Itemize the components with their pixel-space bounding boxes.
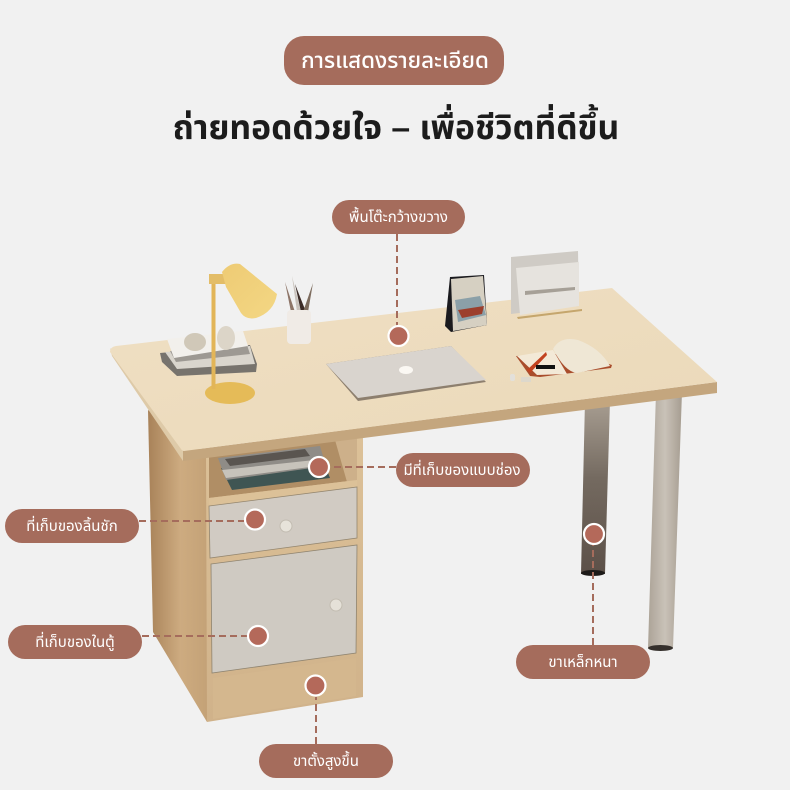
cupboard door	[211, 545, 357, 673]
label: open shelf storage: มีที่เก็บของแบบช่อง	[403, 459, 521, 479]
label: wide desktop: พื้นโต๊ะกว้างขวาง	[349, 206, 448, 226]
metal legs	[581, 392, 682, 651]
open shelf	[209, 438, 357, 506]
drawer	[209, 487, 357, 558]
hotspot: desktop	[388, 326, 408, 346]
label: raised base	[259, 744, 393, 778]
yellow desk lamp	[205, 264, 277, 404]
section badge: การแสดงรายละเอียด	[301, 48, 489, 73]
dashed leader lines	[139, 234, 593, 744]
hotspot: cupboard	[248, 626, 268, 646]
open notebook	[510, 339, 612, 382]
hotspot: steel leg	[584, 524, 604, 544]
file holder	[511, 251, 582, 319]
desk illustration	[110, 251, 717, 722]
main title: ถ่ายทอดด้วยใจ – เพื่อชีวิตที่ดีขึ้น	[173, 104, 619, 147]
label: cupboard storage	[8, 625, 142, 659]
laptop	[326, 346, 486, 401]
pen holder	[285, 276, 313, 344]
label: thick steel legs	[516, 645, 650, 679]
cabinet	[148, 410, 363, 722]
label: thick steel legs: ขาเหล็กหนา	[548, 653, 618, 671]
hotspot: drawer	[245, 510, 265, 530]
label: cupboard storage: ที่เก็บของในตู้	[35, 631, 115, 651]
label: drawer storage	[5, 509, 139, 543]
desk calendar	[445, 275, 487, 332]
hotspot: raised base	[306, 676, 326, 696]
label: drawer storage: ที่เก็บของลิ้นชัก	[26, 515, 118, 535]
desktop	[110, 288, 717, 461]
label: wide desktop	[332, 200, 465, 234]
label: raised base: ขาตั้งสูงขึ้น	[293, 750, 359, 770]
hotspot: open shelf	[309, 457, 329, 477]
books and headphones	[160, 326, 257, 376]
label: open shelf storage	[396, 453, 530, 487]
section badge	[284, 36, 504, 85]
